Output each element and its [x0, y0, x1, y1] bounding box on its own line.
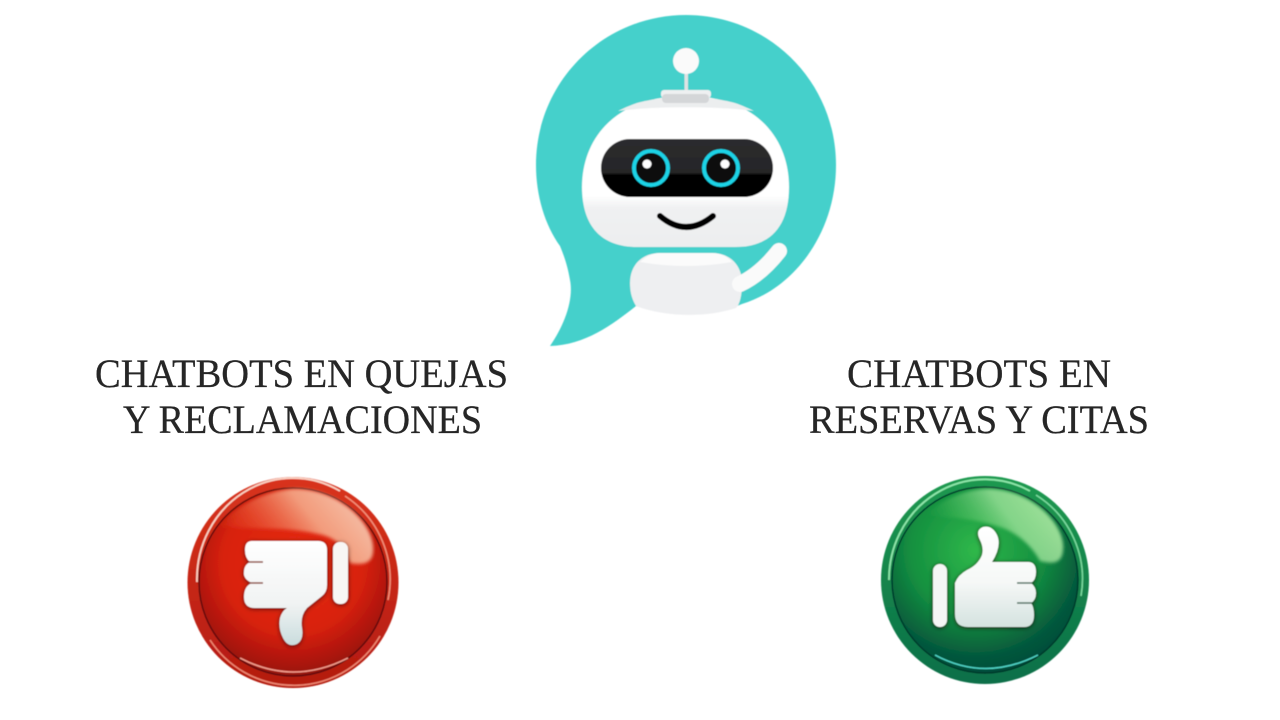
heading: chatbots en reservas y citas: RESERVAS Y CITAS: [809, 397, 1149, 442]
heading: chatbots en reservas y citas: CHATBOTS EN: [847, 351, 1111, 396]
icon: chatbot in speech bubble: [536, 15, 836, 346]
speech bubble: [536, 15, 836, 346]
heading: chatbots en quejas y reclamaciones: CHATBOTS EN QUEJAS: [95, 351, 508, 396]
icon: red thumbs down button: [188, 477, 398, 688]
thumbs down hand: [244, 541, 348, 645]
thumbs up hand: [933, 527, 1036, 627]
robot arm: [740, 251, 779, 284]
robot antenna: [661, 48, 711, 103]
robot visor: [601, 139, 773, 197]
robot body: [630, 253, 742, 315]
icon: green thumbs up button: [881, 476, 1089, 684]
heading: chatbots en quejas y reclamaciones: [95, 351, 508, 442]
heading: chatbots en reservas y citas: [809, 351, 1149, 442]
robot eyes: [634, 151, 738, 185]
heading: chatbots en quejas y reclamaciones: Y RECLAMACIONES: [123, 397, 482, 442]
robot head: [582, 96, 789, 247]
robot smile: [660, 216, 713, 227]
